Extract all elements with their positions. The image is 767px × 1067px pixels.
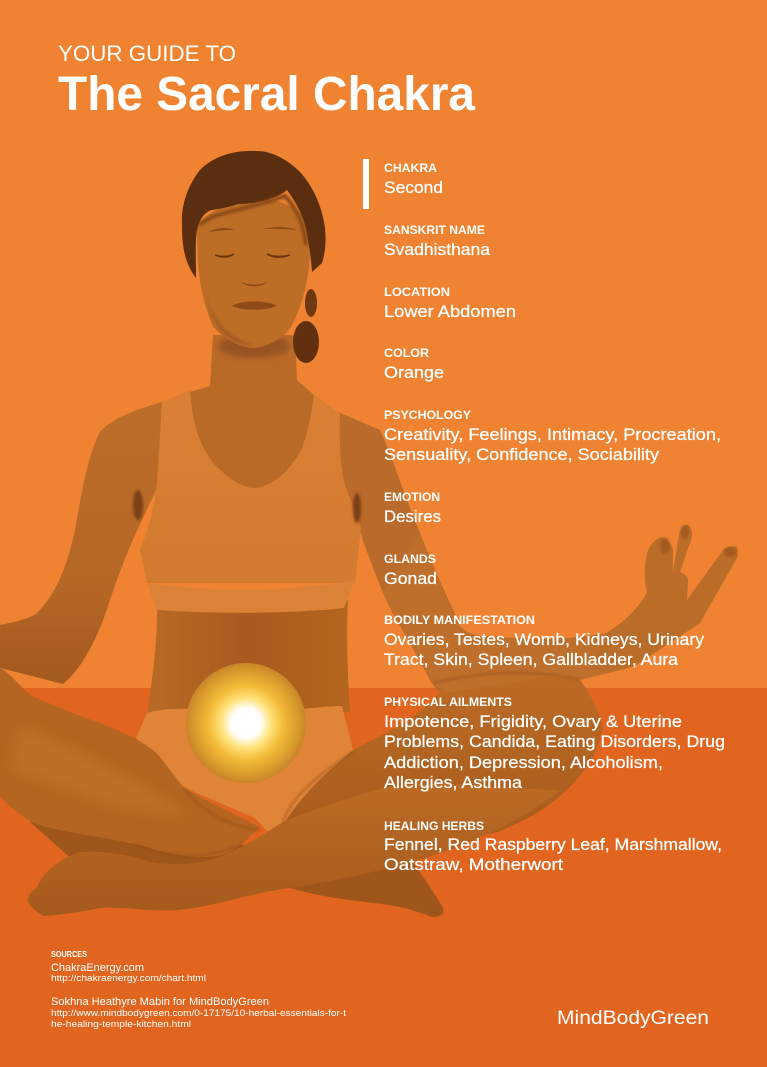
bra cups bbox=[140, 390, 361, 583]
sources bbox=[51, 950, 347, 1029]
head bbox=[182, 151, 326, 363]
fact: color: Orange bbox=[384, 364, 444, 382]
fact: physical ailments: Allergies, Asthma bbox=[384, 774, 523, 792]
fact: location: Lower Abdomen bbox=[384, 303, 516, 321]
fact: physical ailments: Impotence, Frigidity, Ovary & Uterine bbox=[384, 713, 682, 731]
neck shadow under chin bbox=[218, 334, 290, 358]
fact: emotion: EMOTION bbox=[384, 490, 440, 504]
fact: physical ailments bbox=[384, 695, 725, 792]
fact: emotion bbox=[384, 490, 441, 526]
hand and fingers bbox=[590, 525, 738, 670]
fact: bodily manifestation: Tract, Skin, Spleen, Gallbladder, Aura bbox=[384, 651, 679, 669]
hairline shadow bbox=[200, 196, 306, 245]
title kicker: YOUR GUIDE TO bbox=[58, 41, 236, 66]
shorts bbox=[136, 706, 353, 832]
fact: color: COLOR bbox=[384, 346, 429, 360]
source 2: he-healing-temple-kitchen.html bbox=[51, 1019, 191, 1029]
fact: bodily manifestation bbox=[384, 613, 705, 669]
fact: psychology: PSYCHOLOGY bbox=[384, 408, 471, 422]
source 2: Sokhna Heathyre Mabin for MindBodyGreen bbox=[51, 996, 269, 1008]
right upper arm bbox=[335, 412, 470, 694]
left thigh highlight bbox=[10, 725, 190, 815]
fact: sanskrit name: SANSKRIT NAME bbox=[384, 223, 485, 237]
left arm bbox=[0, 402, 175, 684]
body contour lines bbox=[133, 673, 580, 856]
fact: location bbox=[384, 285, 516, 321]
fact: sanskrit name bbox=[384, 223, 491, 259]
back leg and right foot bbox=[30, 822, 443, 917]
face side shading bbox=[204, 290, 254, 345]
bra band bbox=[147, 580, 355, 613]
title bbox=[58, 41, 475, 121]
right thigh and knee bbox=[283, 676, 603, 853]
eyebrows, eyes, nose, lips bbox=[208, 227, 297, 310]
fact: healing herbs: HEALING HERBS bbox=[384, 819, 484, 833]
fact: physical ailments: PHYSICAL AILMENTS bbox=[384, 695, 512, 709]
left thigh bbox=[0, 668, 260, 857]
source 1 bbox=[51, 962, 206, 983]
finger tip shading bbox=[660, 525, 736, 557]
armpit shadows bbox=[133, 490, 361, 523]
fact: chakra bbox=[384, 161, 443, 197]
fact: bodily manifestation: BODILY MANIFESTATION bbox=[384, 613, 535, 627]
source 2 bbox=[51, 996, 347, 1029]
hair curl bbox=[305, 289, 317, 317]
fact: psychology bbox=[384, 408, 721, 464]
fact: glands bbox=[384, 552, 437, 588]
fact: healing herbs bbox=[384, 819, 722, 874]
fact: color bbox=[384, 346, 444, 382]
fact: bodily manifestation: Ovaries, Testes, Womb, Kidneys, Urinary bbox=[384, 631, 705, 649]
bra bbox=[140, 390, 361, 613]
fact: healing herbs: Oatstraw, Motherwort bbox=[384, 856, 563, 874]
figure: meditating woman bbox=[0, 151, 738, 917]
fact: chakra: Second bbox=[384, 179, 443, 197]
fact: psychology: Sensuality, Confidence, Sociability bbox=[384, 446, 660, 464]
sacral chakra glow bbox=[186, 663, 306, 783]
sources heading: SOURCES bbox=[51, 950, 88, 959]
title main: The Sacral Chakra bbox=[58, 68, 475, 121]
torso and waist bbox=[147, 600, 350, 716]
fact: sanskrit name: Svadhisthana bbox=[384, 241, 491, 259]
fact: physical ailments: Addiction, Depression, Alcoholism, bbox=[384, 754, 663, 772]
background: upper light orange bbox=[0, 0, 767, 688]
fact: healing herbs: Fennel, Red Raspberry Leaf, Marshmallow, bbox=[384, 836, 722, 854]
face bbox=[197, 199, 310, 348]
fact: psychology: Creativity, Feelings, Intimacy, Procreation, bbox=[384, 426, 721, 444]
fact: chakra: CHAKRA bbox=[384, 161, 437, 175]
forearm bbox=[383, 533, 700, 693]
source 1: http://chakraenergy.com/chart.html bbox=[51, 973, 206, 983]
background: lower dark orange band bbox=[0, 688, 767, 1067]
shin crossing to left foot bbox=[28, 784, 560, 916]
chakra facts list bbox=[384, 161, 725, 874]
chest and neck bbox=[160, 335, 338, 500]
brand name: MindBodyGreen bbox=[557, 1008, 709, 1029]
source 2: http://www.mindbodygreen.com/0-17175/10-herbal-essentials-for-t bbox=[51, 1008, 347, 1018]
fact: physical ailments: Problems, Candida, Eating Disorders, Drug bbox=[384, 733, 725, 751]
hair bbox=[182, 151, 326, 278]
source 1: ChakraEnergy.com bbox=[51, 962, 144, 974]
hair bun bbox=[293, 321, 319, 363]
fact: glands: Gonad bbox=[384, 570, 437, 588]
fact: location: LOCATION bbox=[384, 285, 450, 299]
accent bar bbox=[363, 159, 369, 209]
fact: emotion: Desires bbox=[384, 508, 441, 526]
fact: glands: GLANDS bbox=[384, 552, 436, 566]
